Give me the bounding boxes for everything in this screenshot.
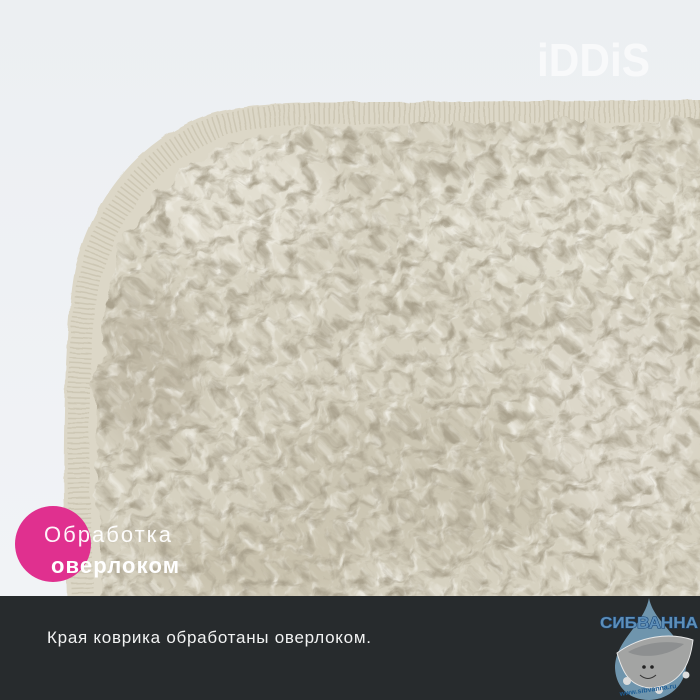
badge title: Обработка [44, 522, 172, 547]
icon: bathtub [617, 636, 693, 694]
badge title: оверлоком [51, 553, 179, 578]
logo: Сибванна [600, 598, 698, 700]
rug [60, 100, 700, 610]
logo url: www.sibvanna.ru [618, 683, 677, 698]
logo wordmark: СИБВАННА [600, 615, 698, 632]
badge title [44, 522, 179, 578]
footer text: Края коврика обработаны оверлоком. [47, 628, 371, 647]
shaggy pile [90, 116, 700, 596]
badge: pink circle [15, 506, 91, 582]
footer band [0, 596, 700, 700]
overlock edge [64, 100, 700, 600]
icon: water drop [615, 598, 686, 700]
iDDiS logo: iDDiS [537, 34, 650, 86]
